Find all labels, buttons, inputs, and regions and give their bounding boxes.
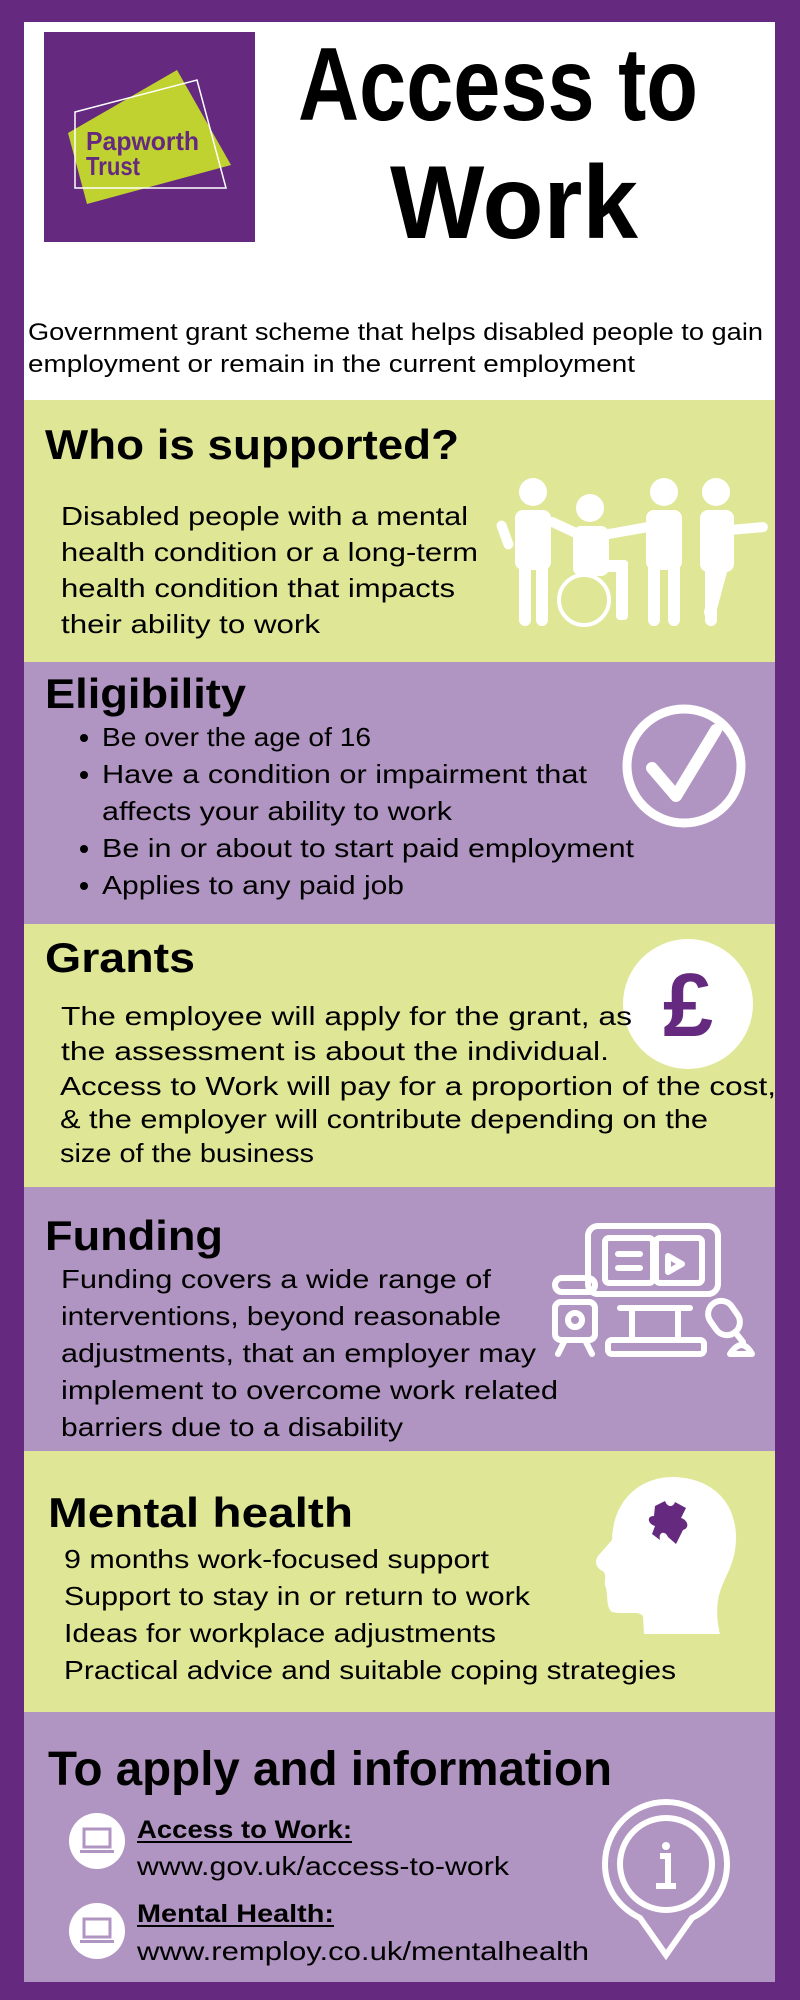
panel: apply and information: [24, 1712, 775, 1982]
subtitle: Government grant scheme that helps disabled people to gain: [28, 319, 763, 346]
logo: Papworth: [86, 126, 199, 156]
heading: who is supported: Who is supported?: [45, 421, 459, 468]
icon: pound: £: [663, 956, 713, 1056]
text block: grants: The employee will apply for the grant, as: [61, 1001, 632, 1031]
bullet list: Applies to any paid job: [102, 870, 404, 900]
text block: mental health: [64, 1544, 676, 1685]
panel: grants: [24, 924, 776, 1187]
heading: eligibility: Eligibility: [45, 670, 247, 717]
panel: funding: [24, 1187, 775, 1451]
heading: mental health: Mental health: [48, 1489, 353, 1536]
icon: head with puzzle: [596, 1477, 736, 1634]
text block: grants: & the employer will contribute depending on the: [60, 1104, 708, 1134]
header panel: [24, 22, 775, 400]
text block: funding: implement to overcome work related: [61, 1375, 558, 1405]
title: Work: [390, 145, 638, 261]
title: [298, 27, 698, 261]
text block: mental health: Practical advice and suitable coping strategies: [64, 1655, 676, 1685]
text block: funding: [61, 1264, 558, 1442]
text block: grants: Access to Work will pay for a proportion of the cost,: [60, 1071, 776, 1101]
heading: funding: Funding: [45, 1212, 223, 1259]
logo: [44, 32, 255, 242]
title: Access to: [298, 27, 698, 143]
heading: grants: Grants: [45, 934, 195, 981]
bullet list: affects your ability to work: [102, 796, 453, 826]
link: access to work: www.gov.uk/access-to-work: [136, 1851, 510, 1881]
bullet list: [80, 722, 635, 900]
text block: grants: size of the business: [60, 1138, 314, 1168]
text block: mental health: Support to stay in or return to work: [64, 1581, 531, 1611]
text block: grants: the assessment is about the individual.: [61, 1036, 609, 1066]
bullet list: Be in or about to start paid employment: [102, 833, 635, 863]
link: mental health: Mental Health:: [137, 1900, 334, 1928]
text block: funding: adjustments, that an employer may: [61, 1338, 536, 1368]
text block: funding: Funding covers a wide range of: [61, 1264, 492, 1294]
link: access to work: Access to Work:: [137, 1816, 352, 1844]
text block: grants: [60, 1001, 776, 1168]
icon: people: [495, 478, 768, 626]
link: access to work: [69, 1813, 510, 1881]
bullet list: Have a condition or impairment that: [102, 759, 588, 789]
icon: computer: [555, 1226, 752, 1354]
icon: info pin: [605, 1802, 727, 1955]
icon: check circle: [627, 709, 741, 823]
link: mental health: www.remploy.co.uk/mentalhealth: [136, 1936, 589, 1966]
text block: who: health condition or a long-term: [61, 537, 478, 567]
text block: who: their ability to work: [61, 609, 321, 639]
panel: eligibility: [24, 662, 775, 924]
text block: funding: barriers due to a disability: [61, 1412, 403, 1442]
text block: who: Disabled people with a mental: [61, 501, 468, 531]
text block: mental health: 9 months work-focused support: [64, 1544, 490, 1574]
text block: funding: interventions, beyond reasonable: [61, 1301, 501, 1331]
text block: who: health condition that impacts: [61, 573, 455, 603]
subtitle: [28, 319, 763, 378]
heading: apply: To apply and information: [48, 1743, 612, 1796]
text block: mental health: Ideas for workplace adjustments: [64, 1618, 496, 1648]
text block: who: [61, 501, 478, 639]
link: mental health: [69, 1900, 589, 1966]
bullet list: Be over the age of 16: [102, 722, 371, 752]
panel: who is supported: [24, 400, 775, 662]
panel: mental health: [24, 1451, 775, 1712]
icon: pound: [623, 939, 753, 1069]
subtitle: employment or remain in the current employment: [28, 351, 635, 378]
logo: Trust: [86, 151, 140, 181]
